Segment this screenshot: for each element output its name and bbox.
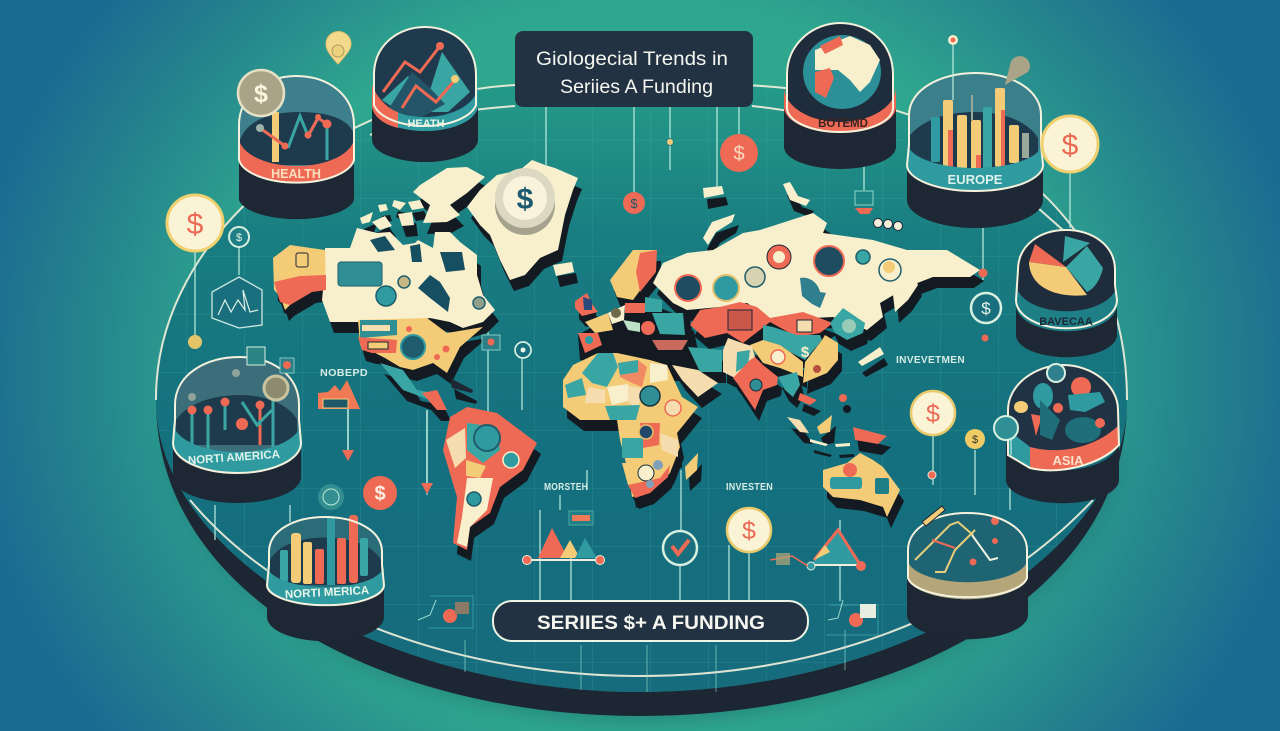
pencil: [922, 506, 945, 526]
rim: [908, 513, 1027, 597]
line chart: [383, 46, 455, 108]
band: [1016, 283, 1117, 331]
band: [907, 558, 1028, 599]
coin: left dollar: $: [187, 208, 204, 241]
pill text: SERIIES $+ A FUNDING: [537, 613, 765, 634]
title text: Giologecial Trends in: [536, 49, 728, 70]
coin: right ring dollar: $: [981, 299, 991, 318]
icon: small chart bottom left: [418, 596, 473, 628]
map: Russia: [653, 213, 980, 330]
canister body: [907, 165, 1043, 228]
platform: soft shadow: [170, 450, 1120, 722]
rim: [787, 23, 893, 132]
canister top: [1008, 365, 1118, 465]
map: Alaska south red: [274, 275, 326, 305]
canister: Botemd globe: [784, 23, 896, 169]
canister body: [173, 440, 301, 503]
map: western red panel: [358, 337, 397, 353]
map: Arctic islands of Russia: [553, 182, 918, 366]
map: Alaska: [273, 245, 326, 310]
panel: Series A funding pill: [493, 601, 808, 641]
canister glass: [269, 517, 382, 600]
arrow: down left: [342, 409, 354, 461]
canister: North America left: [173, 347, 301, 503]
rim: [239, 76, 354, 183]
canister floor: [910, 112, 1038, 170]
band: [1030, 425, 1119, 470]
map: South America: [443, 407, 537, 550]
icon: mini mountain chart: [318, 380, 360, 409]
lollipop chart: [188, 369, 288, 450]
small chart badge: [994, 416, 1018, 455]
map: Mongolia east teal: [830, 308, 865, 340]
map: China: [750, 325, 838, 383]
rim: [374, 27, 476, 126]
band: [372, 85, 478, 131]
canister top: [1018, 230, 1115, 328]
platform: dark rim: [156, 400, 1127, 716]
pin marker: [1005, 56, 1030, 85]
coin: top right dollar: [1042, 116, 1098, 172]
small badges: [247, 347, 294, 373]
map: USA: [358, 318, 483, 373]
coin: small red dollar: [623, 192, 645, 214]
map: Mexico: [380, 363, 433, 400]
map: Australia: [823, 453, 900, 517]
coin: left dollar: [167, 195, 223, 251]
icon: small chart bottom right: [826, 600, 878, 635]
marker: red dot lower: [928, 471, 936, 479]
canister glass: [239, 76, 354, 183]
map: Scandinavia: [610, 250, 657, 300]
canister: right line chart: [907, 506, 1028, 639]
canister floor: [240, 112, 354, 165]
coin: $: [254, 80, 268, 108]
coin: center dollar: [727, 508, 771, 552]
badge glowing: [318, 484, 344, 510]
platform: surface: [155, 84, 1128, 692]
map: western and central Europe: [578, 297, 688, 353]
map: Southeast Asia: [778, 372, 817, 405]
map: India: [733, 357, 778, 410]
icon: mic cluster near Russia: [874, 218, 902, 230]
map: Canada: [322, 228, 495, 328]
canister: Asia: [994, 364, 1119, 503]
coin: small yellow dollar: [965, 429, 985, 449]
rim: [1016, 230, 1117, 328]
rim: [267, 517, 384, 605]
rim: [173, 357, 301, 473]
band label: NORTI MERICA: [285, 585, 369, 601]
canister glass: [175, 357, 299, 470]
marker: red dot: [981, 334, 989, 342]
mountains: [382, 52, 470, 112]
canister glass: [374, 27, 476, 126]
title text: [536, 49, 728, 98]
band: [907, 142, 1043, 190]
band: [784, 87, 896, 133]
map: Iran and Gulf: [688, 347, 722, 372]
map: Pakistan and Himalaya: [723, 338, 755, 378]
map: Iceland and UK: [575, 293, 598, 316]
world map: [273, 160, 980, 550]
band label: ASIA: [1052, 453, 1084, 468]
canister body: [1016, 300, 1117, 357]
canister body: [1006, 440, 1119, 503]
band red: [372, 85, 398, 128]
canister: Bavecaa pie: [1016, 230, 1117, 357]
marker: small yellow: [666, 138, 674, 146]
marker: ring on atlantic: [515, 342, 531, 358]
canister: Europe: [907, 56, 1043, 228]
map: Africa: [563, 353, 698, 498]
canister floor: [176, 395, 297, 445]
icon: small tag: [569, 511, 593, 525]
canister glass: [908, 513, 1027, 596]
map: USA west panel: [360, 320, 397, 338]
bar chart: [931, 88, 1029, 170]
coin: red dollar lower: $: [374, 483, 386, 505]
rim: [1008, 365, 1119, 470]
canister: Health left: [238, 70, 354, 219]
chart dots: [970, 517, 999, 566]
canister body: [267, 585, 384, 641]
label: Morsteh: MORSTEH: [544, 482, 588, 493]
map: Arctic islands: [360, 200, 424, 230]
canister top: [787, 23, 893, 132]
label: Invevetmen: INVEVETMEN: [896, 355, 965, 366]
map: Caribbean: [450, 378, 473, 393]
marker: yellow dot: [188, 335, 202, 349]
bar chart: [280, 515, 368, 585]
map: Baffin island: [413, 167, 485, 223]
coin: right dollar: [911, 391, 955, 435]
globe: [803, 35, 881, 109]
chart dots: [436, 42, 459, 83]
marker: top right pin: [948, 35, 958, 100]
coin: top right dollar: $: [1062, 129, 1079, 162]
map: Central America: [422, 390, 447, 410]
rim: [907, 73, 1043, 191]
label: Nobepd: NOBEPD: [320, 368, 368, 379]
band label: HEALTH: [271, 167, 321, 181]
connector lines: [195, 106, 1070, 602]
map: Finland: [636, 250, 657, 292]
map: icons on Eurasia: [675, 245, 901, 391]
band: [173, 422, 301, 473]
line chart: [915, 522, 998, 572]
coin: red dollar top: $: [733, 143, 745, 165]
icon: check mark: [663, 531, 697, 565]
marker: square: [482, 335, 500, 350]
canister floor: [270, 538, 381, 585]
canister: Health top: [372, 27, 478, 162]
band label: HEATH: [407, 118, 445, 130]
coin: [238, 70, 284, 116]
canister body: [239, 160, 354, 219]
band label: NORTI AMERICA: [188, 449, 280, 467]
map: icons on Eurasia: $: [801, 344, 810, 361]
coin: center dollar: $: [742, 517, 756, 545]
small globe badge: [1047, 364, 1065, 382]
coin: small yellow dollar: $: [972, 434, 978, 446]
coin: right ring dollar: [971, 293, 1001, 323]
icon: Greenland dollar button: $: [517, 183, 534, 216]
icon: small tag top: [855, 191, 873, 214]
canister glass: [909, 73, 1041, 191]
panel: title: [515, 31, 753, 107]
pie chart: [1029, 236, 1103, 296]
mini world map: [1014, 377, 1105, 443]
band label: BOTEMD: [818, 118, 868, 130]
band teal: [1008, 430, 1030, 468]
marker: Kamchatka dot: [978, 268, 988, 278]
band label: BAVECAA: [1039, 316, 1093, 328]
icon: Greenland dollar button: [495, 168, 555, 235]
arrow: down middle: [421, 410, 433, 494]
icon: hex line chart: [212, 277, 262, 328]
canister: North America lower: [267, 484, 384, 641]
coin: red dollar top: [720, 134, 758, 172]
coin: red dollar lower: [363, 476, 397, 510]
title text: Seriies A Funding: [560, 77, 713, 98]
map: Indonesia: [787, 394, 887, 447]
canister body: [907, 575, 1028, 639]
line chart: [256, 112, 332, 162]
map: Greenland: [467, 160, 578, 280]
icon: peak chart right: [770, 530, 866, 571]
coin: left ring badge: [229, 227, 249, 247]
map: Europe-Mediterranean backing: [578, 300, 700, 370]
coin: small red dollar: $: [630, 196, 638, 211]
canister body: [372, 105, 478, 162]
coin: left ring badge: $: [236, 232, 242, 244]
coin: pin top: [326, 32, 351, 64]
band: [267, 565, 384, 605]
map: icons on North America: [296, 253, 485, 359]
band: [239, 140, 354, 183]
icon: mountain chart center: [522, 528, 604, 564]
band label: EUROPE: [948, 172, 1003, 187]
coin: right dollar: $: [926, 400, 940, 428]
map: Arabia: [672, 365, 718, 397]
canister body: [784, 105, 896, 169]
label: Investen: INVESTEN: [726, 482, 773, 493]
map: Hudson Bay and channels: [370, 236, 465, 312]
map: Central Asia band: [690, 302, 833, 343]
map: Eastern North America red dots: [406, 326, 450, 360]
